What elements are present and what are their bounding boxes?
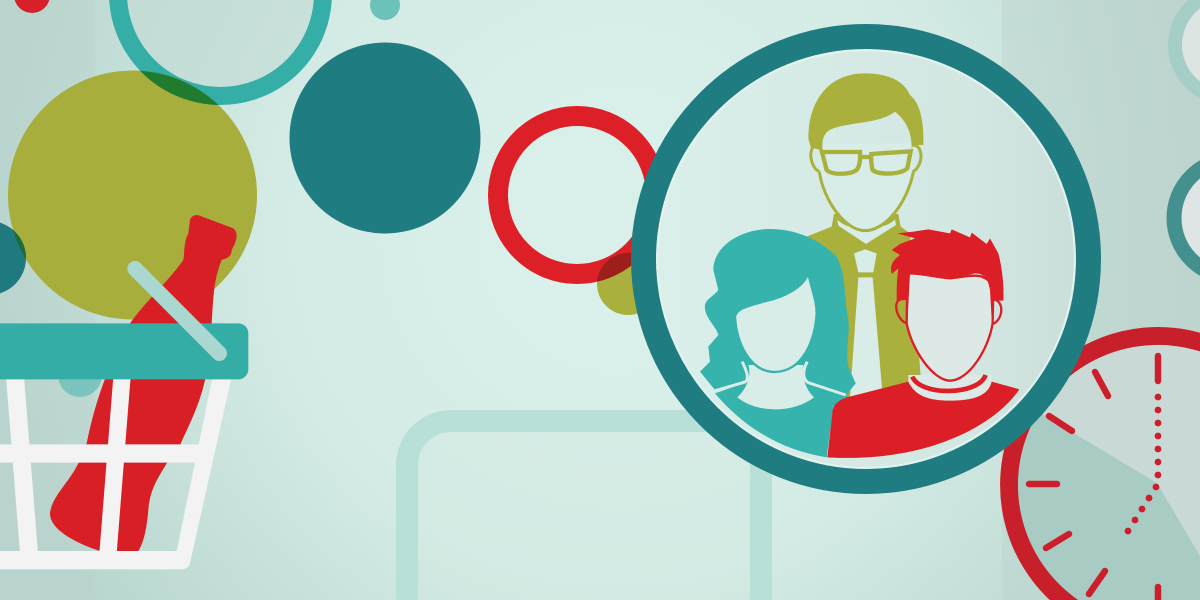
ring and olive overlap (13, 70, 218, 260)
man in red (827, 229, 1019, 458)
magnifier lens (644, 36, 1088, 482)
red shirt (827, 382, 1019, 458)
clock ticks (1029, 356, 1158, 600)
man body (807, 214, 922, 397)
man with glasses (807, 73, 923, 397)
lens ring (644, 36, 1088, 482)
shopping basket (0, 215, 248, 569)
basket frame (0, 377, 232, 569)
large dark teal circle (290, 42, 480, 234)
clock rim (1000, 327, 1200, 600)
man face outline (811, 145, 921, 231)
man collar (837, 219, 896, 244)
small red circle (14, 0, 50, 13)
small teal dot (370, 0, 400, 20)
red bottle (50, 215, 237, 551)
red collar (912, 375, 986, 391)
man glasses (822, 151, 911, 174)
dark teal left circle (0, 221, 26, 295)
red neck background (908, 375, 992, 401)
woman neck (737, 365, 814, 409)
man face fill (819, 143, 913, 231)
man tie (850, 249, 882, 397)
rounded square outline (407, 421, 761, 600)
woman collar lines (714, 362, 846, 395)
woman body (715, 380, 848, 457)
small olive circle (597, 253, 659, 315)
basket handle (135, 269, 219, 353)
woman hair (700, 229, 856, 397)
clock (1000, 327, 1200, 600)
red ears (896, 299, 1001, 324)
clock wedge (1016, 411, 1200, 600)
clock dotted hands (1125, 394, 1161, 534)
teal ring top (118, 0, 323, 96)
ring and small olive overlap (597, 253, 632, 282)
right light teal ring (1175, 0, 1200, 98)
woman face (735, 273, 817, 372)
teal dot behind basket (58, 353, 102, 397)
red face (907, 273, 993, 381)
red ring (498, 116, 656, 274)
man hair (808, 73, 923, 151)
red hair (891, 229, 1003, 325)
clock face (1018, 345, 1200, 600)
people group (700, 73, 1019, 458)
woman (700, 229, 856, 457)
basket rim (0, 323, 248, 379)
large olive circle (8, 70, 257, 320)
right dark teal ring (1174, 159, 1200, 277)
lens fill (656, 49, 1076, 469)
